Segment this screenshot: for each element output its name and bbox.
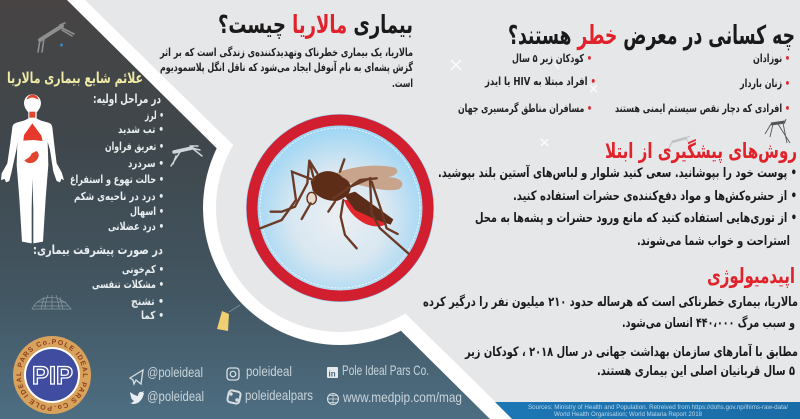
social: instagram bbox=[227, 363, 292, 380]
list: at-risk groups: • زنان باردار bbox=[739, 77, 790, 90]
text block: early symptoms: • اسهال bbox=[130, 205, 164, 218]
text block: prevention methods bbox=[438, 164, 797, 249]
text block: advanced symptoms: • کما bbox=[141, 309, 164, 322]
logo: Pole Ideal Pars: POLE IDEAL PARS Co.POLE IDEAL PARS Co. bbox=[16, 339, 88, 411]
icon: small mosquito top left bbox=[38, 23, 74, 52]
social: linkedin: in bbox=[328, 370, 336, 378]
social: telegram: @poleideal bbox=[147, 364, 203, 380]
footer sources bar: World Health Organisation; World Malaria Report 2018 bbox=[554, 411, 702, 418]
diagonal white band bbox=[0, 0, 513, 419]
icon: insect spray bottle bbox=[217, 305, 240, 331]
icon: pale mosquito behind heading bbox=[668, 136, 690, 150]
text block: malaria definition bbox=[159, 46, 413, 90]
text block: malaria definition: مالاریا، یک بیماری خطرناک وتهدیدکننده‌ی زندگی است که بر اثر bbox=[159, 46, 413, 59]
icon: human body bbox=[1, 94, 64, 243]
social: aparat bbox=[227, 387, 313, 404]
icon: small dark mosquito bbox=[765, 119, 790, 143]
text block: epidemiology bbox=[423, 294, 798, 379]
text block: early symptoms: • حالت تهوع و استفراغ bbox=[70, 173, 164, 186]
list: at-risk groups: • نوزادان bbox=[753, 52, 790, 65]
text block: malaria definition: است. bbox=[392, 77, 413, 90]
heading: common symptoms: علائم شایع بیماری مالاریا bbox=[7, 69, 143, 87]
text block: early symptoms: • لرز bbox=[144, 109, 164, 122]
text block: early symptoms: در مراحل اولیه: bbox=[93, 91, 161, 106]
social: aparat: poleidealpars bbox=[245, 387, 313, 403]
social: twitter bbox=[130, 388, 204, 404]
footer sources bar: Sources: Ministry of Health and Population. Retreived from https://dohs.gov.np/ihims-raw-data/ bbox=[528, 404, 788, 411]
text block: early symptoms: • تعریق فراوان bbox=[105, 140, 164, 153]
text block: early symptoms: • سردرد bbox=[128, 157, 164, 170]
icon: pale x marks bbox=[451, 60, 597, 146]
social: instagram: poleideal bbox=[246, 363, 292, 379]
icon: mosquito net bbox=[32, 295, 71, 309]
text block: malaria definition: گزش پشه‌ای به نام آنوفل ایجاد می‌شود که ناقل انگل پلاسمودیوم bbox=[160, 60, 413, 74]
logo: Pole Ideal Pars: PIP bbox=[32, 362, 73, 390]
grey disc bbox=[216, 84, 464, 332]
text block: early symptoms: • درد در ناحیه‌ی شکم bbox=[74, 190, 164, 203]
social: telegram bbox=[130, 364, 203, 384]
list: at-risk groups: • افراد مبتلا به HIV یا ایدز bbox=[484, 75, 596, 88]
text block: early symptoms: • درد عضلانی bbox=[108, 220, 164, 233]
text block: early symptoms: • تب شدید bbox=[118, 123, 164, 136]
social: twitter: @poleideal bbox=[147, 388, 204, 404]
text block: early symptoms bbox=[70, 91, 164, 233]
list: at-risk groups bbox=[458, 52, 790, 115]
text block: advanced symptoms: در صورت پیشرفت بیماری: bbox=[33, 242, 163, 257]
white ring around disc bbox=[203, 148, 401, 345]
text block: advanced symptoms: • تشنج bbox=[131, 295, 164, 308]
text block: advanced symptoms: • مشکلات تنفسی bbox=[92, 278, 164, 291]
list: at-risk groups: • مسافران مناطق گرمسیری جهان bbox=[458, 102, 592, 115]
text block: advanced symptoms: • کم‌خونی bbox=[122, 263, 164, 276]
panel: symptoms dark background bbox=[0, 0, 490, 419]
text block: advanced symptoms bbox=[33, 242, 164, 322]
heading: what is malaria: بیماری مالاریا چیست؟ bbox=[218, 10, 413, 39]
icon: mosquito in red circle bbox=[246, 114, 434, 302]
icon: small mosquito right of symptoms bbox=[171, 146, 202, 166]
list: at-risk groups: • کودکان زیر ۵ سال bbox=[512, 52, 592, 65]
social: linkedin: Pole Ideal Pars Co. bbox=[342, 362, 429, 378]
social: linkedin bbox=[327, 362, 429, 378]
social: website: www.medpip.com/mag bbox=[342, 389, 462, 405]
footer sources bar bbox=[495, 402, 800, 419]
